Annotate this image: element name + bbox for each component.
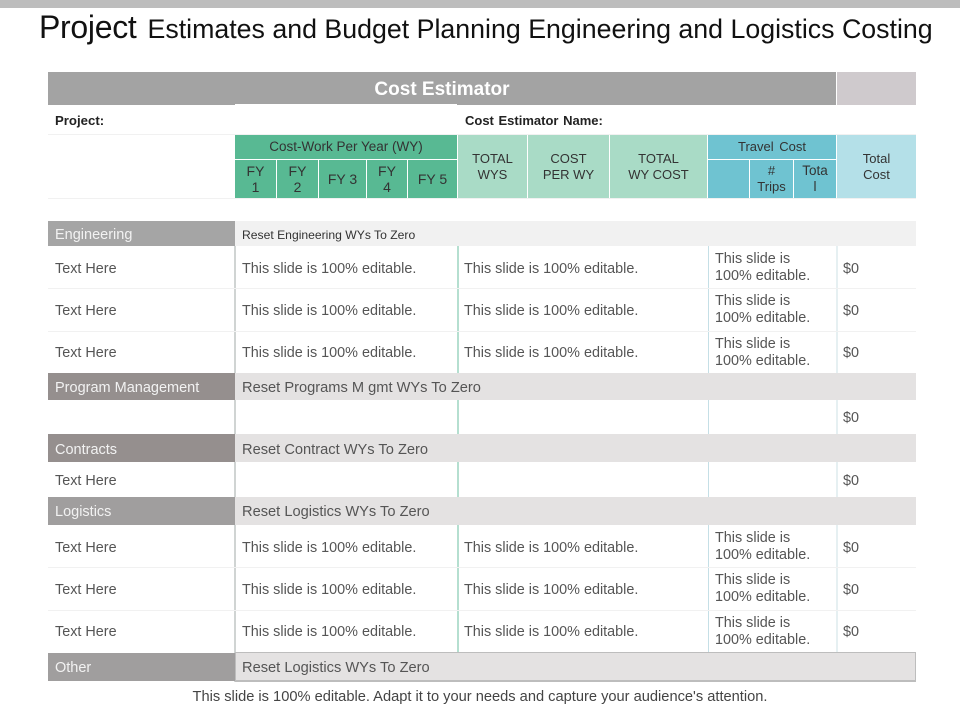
text: $0 <box>843 345 859 361</box>
travel cost: Travel Cost <box>738 139 806 154</box>
text: This slide is <box>715 293 790 309</box>
reset engineering: Reset Engineering WYs To Zero <box>242 228 415 242</box>
FY 2: 2 <box>294 179 301 195</box>
text: This slide is 100% editable. <box>242 345 416 361</box>
total wys: WYS <box>478 166 507 182</box>
reset contract: Reset Contract WYs To Zero <box>242 442 428 458</box>
header bar: cost estimator: Cost Estimator <box>374 78 510 100</box>
text: This slide is 100% editable. <box>464 261 638 277</box>
text: This slide is 100% editable. <box>464 582 638 598</box>
section: program management <box>48 373 235 400</box>
project label: Project: <box>55 113 104 128</box>
row 3: Text Here <box>55 345 117 361</box>
text: This slide is <box>715 336 790 352</box>
footer note: This slide is 100% editable. Adapt it to your needs and capture your audience's attention. <box>193 689 767 705</box>
reset logistics <box>235 497 916 525</box>
program value: $0 <box>843 410 859 426</box>
text: This slide is <box>715 615 790 631</box>
FY 5 <box>408 160 457 198</box>
text: This slide is 100% editable. <box>242 261 416 277</box>
top bar <box>0 0 960 8</box>
FY 1: FY <box>247 163 264 179</box>
reset logistics: Reset Logistics WYs To Zero <box>242 504 430 520</box>
section: contracts <box>48 434 235 462</box>
total cost <box>837 135 916 198</box>
total wy cost <box>610 135 707 198</box>
section: engineering <box>48 221 235 246</box>
section: contracts: Contracts <box>55 442 117 458</box>
text: 100% editable. <box>715 268 810 284</box>
cost per wy <box>528 135 609 198</box>
FY 3 <box>319 160 366 198</box>
section: program management: Program Management <box>55 380 199 396</box>
text: This slide is <box>715 530 790 546</box>
FY 4: FY <box>378 163 396 179</box>
row 2: Text Here <box>55 303 117 319</box>
text: 100% editable. <box>715 589 810 605</box>
text: This slide is 100% editable. <box>464 345 638 361</box>
text: This slide is 100% editable. <box>242 303 416 319</box>
header: cost-work per year <box>235 135 457 159</box>
text: This slide is 100% editable. <box>464 540 638 556</box>
text: This slide is 100% editable. <box>242 624 416 640</box>
text: 100% editable. <box>715 632 810 648</box>
section: logistics <box>48 497 235 525</box>
cost per wy: PER WY <box>543 166 594 182</box>
cost estimator name label: Cost Estimator Name: <box>465 113 603 128</box>
reset programs <box>235 373 916 400</box>
text: $0 <box>843 261 859 277</box>
row 6: Text Here <box>55 624 117 640</box>
section: logistics: Logistics <box>55 504 111 520</box>
reset contract <box>235 434 916 462</box>
reset programs: Reset Programs M gmt WYs To Zero <box>242 380 481 396</box>
total: l <box>814 179 816 194</box>
FY 2 <box>277 160 318 198</box>
row 5: Text Here <box>55 582 117 598</box>
total cost: Total <box>863 150 890 166</box>
text: 100% editable. <box>715 353 810 369</box>
FY 4 <box>367 160 407 198</box>
contracts row: Text Here <box>55 473 117 489</box>
text: $0 <box>843 303 859 319</box>
cost per wy: COST <box>550 150 587 166</box>
text: 100% editable. <box>715 310 810 326</box>
text: This slide is <box>715 572 790 588</box>
text: $0 <box>843 582 859 598</box>
FY 4: 4 <box>383 179 391 195</box>
travel blank <box>708 160 749 198</box>
FY 2: FY <box>289 163 306 179</box>
text: This slide is <box>715 251 790 267</box>
text: $0 <box>843 540 859 556</box>
text: 100% editable. <box>715 547 810 563</box>
trips: Trips <box>757 179 786 194</box>
column lines <box>234 246 236 682</box>
total cost: Cost <box>863 166 890 182</box>
section: other <box>48 653 235 681</box>
total: Tota <box>802 163 828 178</box>
text: This slide is 100% editable. <box>464 303 638 319</box>
travel cost <box>708 135 836 159</box>
header bar: cost estimator <box>48 72 836 105</box>
total wy cost: TOTAL <box>638 150 679 166</box>
total wys: TOTAL <box>472 150 513 166</box>
header bar end cell <box>837 72 916 105</box>
FY 1: 1 <box>252 179 259 195</box>
header: cost-work per year: Cost-Work Per Year (WY) <box>269 139 423 154</box>
text: $0 <box>843 473 859 489</box>
text: This slide is 100% editable. <box>464 624 638 640</box>
FY 3: FY 3 <box>328 171 357 187</box>
reset engineering <box>235 221 916 246</box>
title: Project Estimates and Budget Planning Engineering and Logistics Costing <box>39 9 933 45</box>
section: engineering: Engineering <box>55 226 132 242</box>
text: This slide is 100% editable. <box>242 540 416 556</box>
total wys <box>458 135 527 198</box>
total <box>794 160 836 198</box>
FY 1 <box>235 160 276 198</box>
FY 5: FY 5 <box>418 171 447 187</box>
trips <box>750 160 793 198</box>
section: other: Other <box>55 660 91 676</box>
row 1: Text Here <box>55 261 117 277</box>
reset other: Reset Logistics WYs To Zero <box>242 660 430 676</box>
project value box <box>235 104 457 135</box>
total wy cost: WY COST <box>628 166 689 182</box>
text: $0 <box>843 624 859 640</box>
row 4: Text Here <box>55 540 117 556</box>
reset other <box>235 652 916 682</box>
table: cost estimator <box>48 72 916 682</box>
trips: # <box>768 163 775 178</box>
text: This slide is 100% editable. <box>242 582 416 598</box>
